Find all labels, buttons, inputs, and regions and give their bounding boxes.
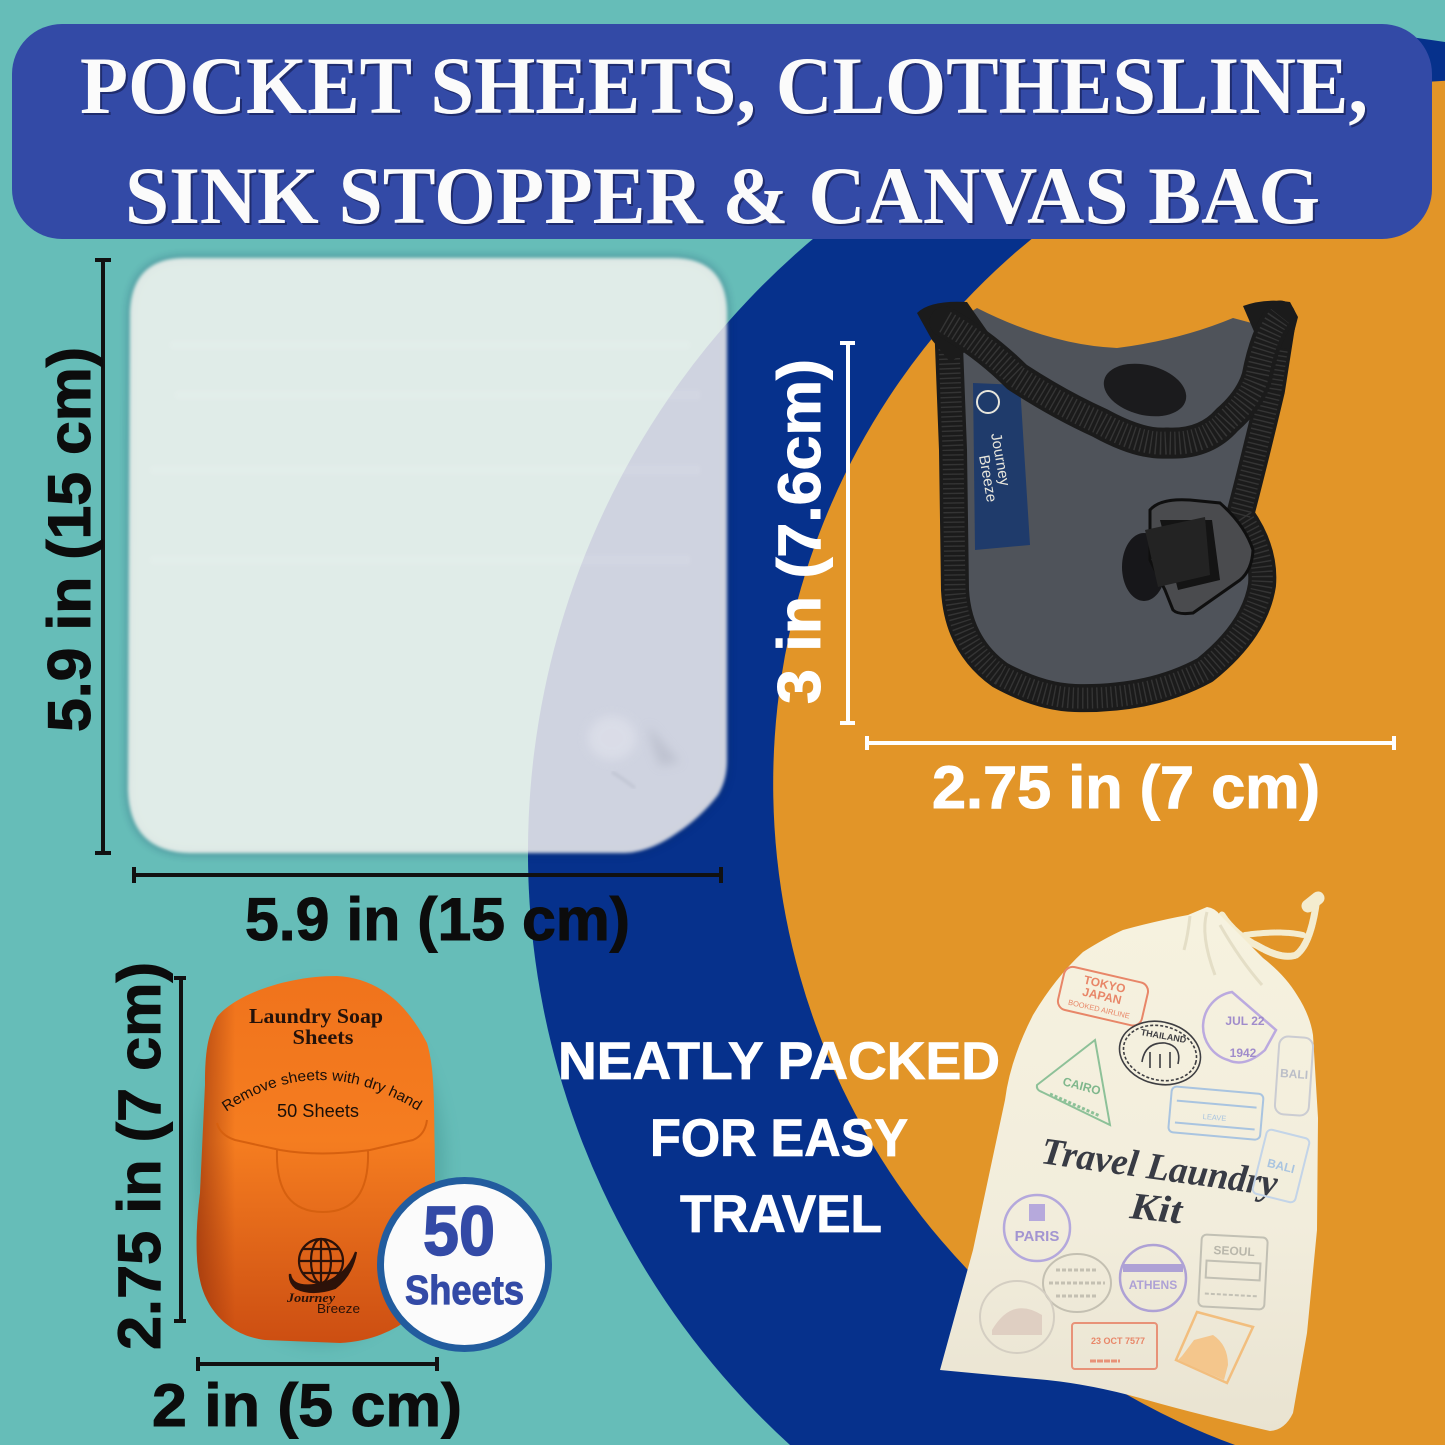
stamp: Rome (980, 1281, 1054, 1353)
dimension: case width: 2 in (5 cm) (152, 1372, 462, 1439)
stamp: date: JUL 22 (1225, 1014, 1265, 1028)
stamp: Tokyo (1056, 965, 1150, 1027)
callout: neatly packed (558, 1032, 1000, 1244)
stamp: Athens (1120, 1245, 1186, 1311)
stamp: blue rectangle (1168, 1086, 1264, 1140)
stamp: Bali: BALI (1266, 1156, 1296, 1176)
stamp: date: 1942 (1230, 1046, 1257, 1060)
snap button (1098, 356, 1192, 424)
title line 2: SINK STOPPER & CANVAS BAG (125, 150, 1320, 241)
stamp: Bali (1252, 1129, 1310, 1203)
gathers (1184, 912, 1262, 985)
stamp: Taj Mahal (1176, 1312, 1253, 1383)
drawstring (1222, 898, 1318, 956)
stamp: right side: BALI (1280, 1066, 1309, 1082)
soap sheets case: Sheets (292, 1025, 354, 1049)
stamp: Tokyo: TOKYO (1082, 973, 1127, 996)
stamp: gray oval (1043, 1254, 1111, 1312)
dimension: pouch height (766, 343, 855, 723)
laundry sheet (128, 258, 727, 853)
orange case body (197, 976, 438, 1343)
stamp: orange rectangle: 23 OCT 7577 (1091, 1336, 1145, 1346)
dimension: pouch width (867, 736, 1394, 821)
dimension: sheet height: 5.9 in (15 cm) (36, 347, 103, 732)
stamp: Seoul (1198, 1234, 1268, 1310)
stamp: orange rectangle (1072, 1323, 1157, 1369)
buckle (1122, 500, 1253, 614)
lid edge and thumb cut-out (217, 1120, 427, 1212)
sheet count on case: 50 Sheets (277, 1100, 359, 1121)
stamp: Paris (1004, 1195, 1070, 1261)
stamp: triangle (1037, 1040, 1110, 1125)
badge: 50 sheets (380, 1180, 548, 1348)
canvas bag: Kit (1127, 1185, 1186, 1233)
pouch body (948, 308, 1278, 700)
title line 1: POCKET SHEETS, CLOTHESLINE, (80, 40, 1368, 131)
soap sheets case (194, 976, 446, 1346)
stamp: date (1203, 992, 1276, 1062)
icon: globe logo (290, 1239, 356, 1292)
stamp: Seoul: SEOUL (1213, 1243, 1255, 1259)
dimension: case height: 2.75 in (7 cm) (106, 962, 173, 1350)
badge: 50 sheets: Sheets (405, 1267, 524, 1313)
dimension: pouch width: 2.75 in (7 cm) (932, 754, 1320, 821)
callout: neatly packed: NEATLY PACKED (558, 1032, 1000, 1091)
flap band (917, 301, 1298, 443)
callout: neatly packed: TRAVEL (680, 1185, 882, 1244)
stamp: Tokyo: BOOKED AIRLINE (1067, 998, 1131, 1021)
sink stopper pouch (917, 301, 1298, 700)
brand label: Journey (987, 432, 1013, 488)
brand label: Breeze (975, 454, 1000, 504)
dimension: sheet width (134, 867, 721, 953)
callout: neatly packed: FOR EASY (650, 1109, 908, 1168)
curved instruction: Remove sheets with dry hand (222, 1070, 423, 1112)
brand name: Journey (286, 1291, 336, 1305)
brand label (973, 383, 1030, 550)
stamp: Tokyo: JAPAN (1081, 985, 1123, 1007)
canvas bag (940, 898, 1318, 1431)
stamp: right side (1274, 1036, 1314, 1116)
dimension: sheet width: 5.9 in (15 cm) (245, 886, 630, 953)
dimension: sheet height (36, 260, 111, 853)
title banner (12, 24, 1432, 241)
stamp: Athens: ATHENS (1129, 1278, 1177, 1292)
soap sheets case: Breeze (317, 1302, 360, 1316)
case heading: Laundry Soap (249, 1004, 383, 1028)
stamp: triangle: CAIRO (1061, 1074, 1102, 1098)
badge: 50 sheets: 50 (423, 1192, 495, 1270)
bag body (940, 907, 1318, 1431)
stamp: Thailand: THAILAND (1140, 1027, 1188, 1045)
dimension: pouch height: 3 in (7.6cm) (766, 359, 833, 704)
stamp: Thailand (1113, 1013, 1207, 1093)
pouch webbing (948, 320, 1282, 698)
stamp: blue rectangle: LEAVE (1202, 1112, 1227, 1123)
stamp: Paris: PARIS (1015, 1228, 1059, 1245)
bag title: Travel Laundry (1039, 1130, 1280, 1205)
